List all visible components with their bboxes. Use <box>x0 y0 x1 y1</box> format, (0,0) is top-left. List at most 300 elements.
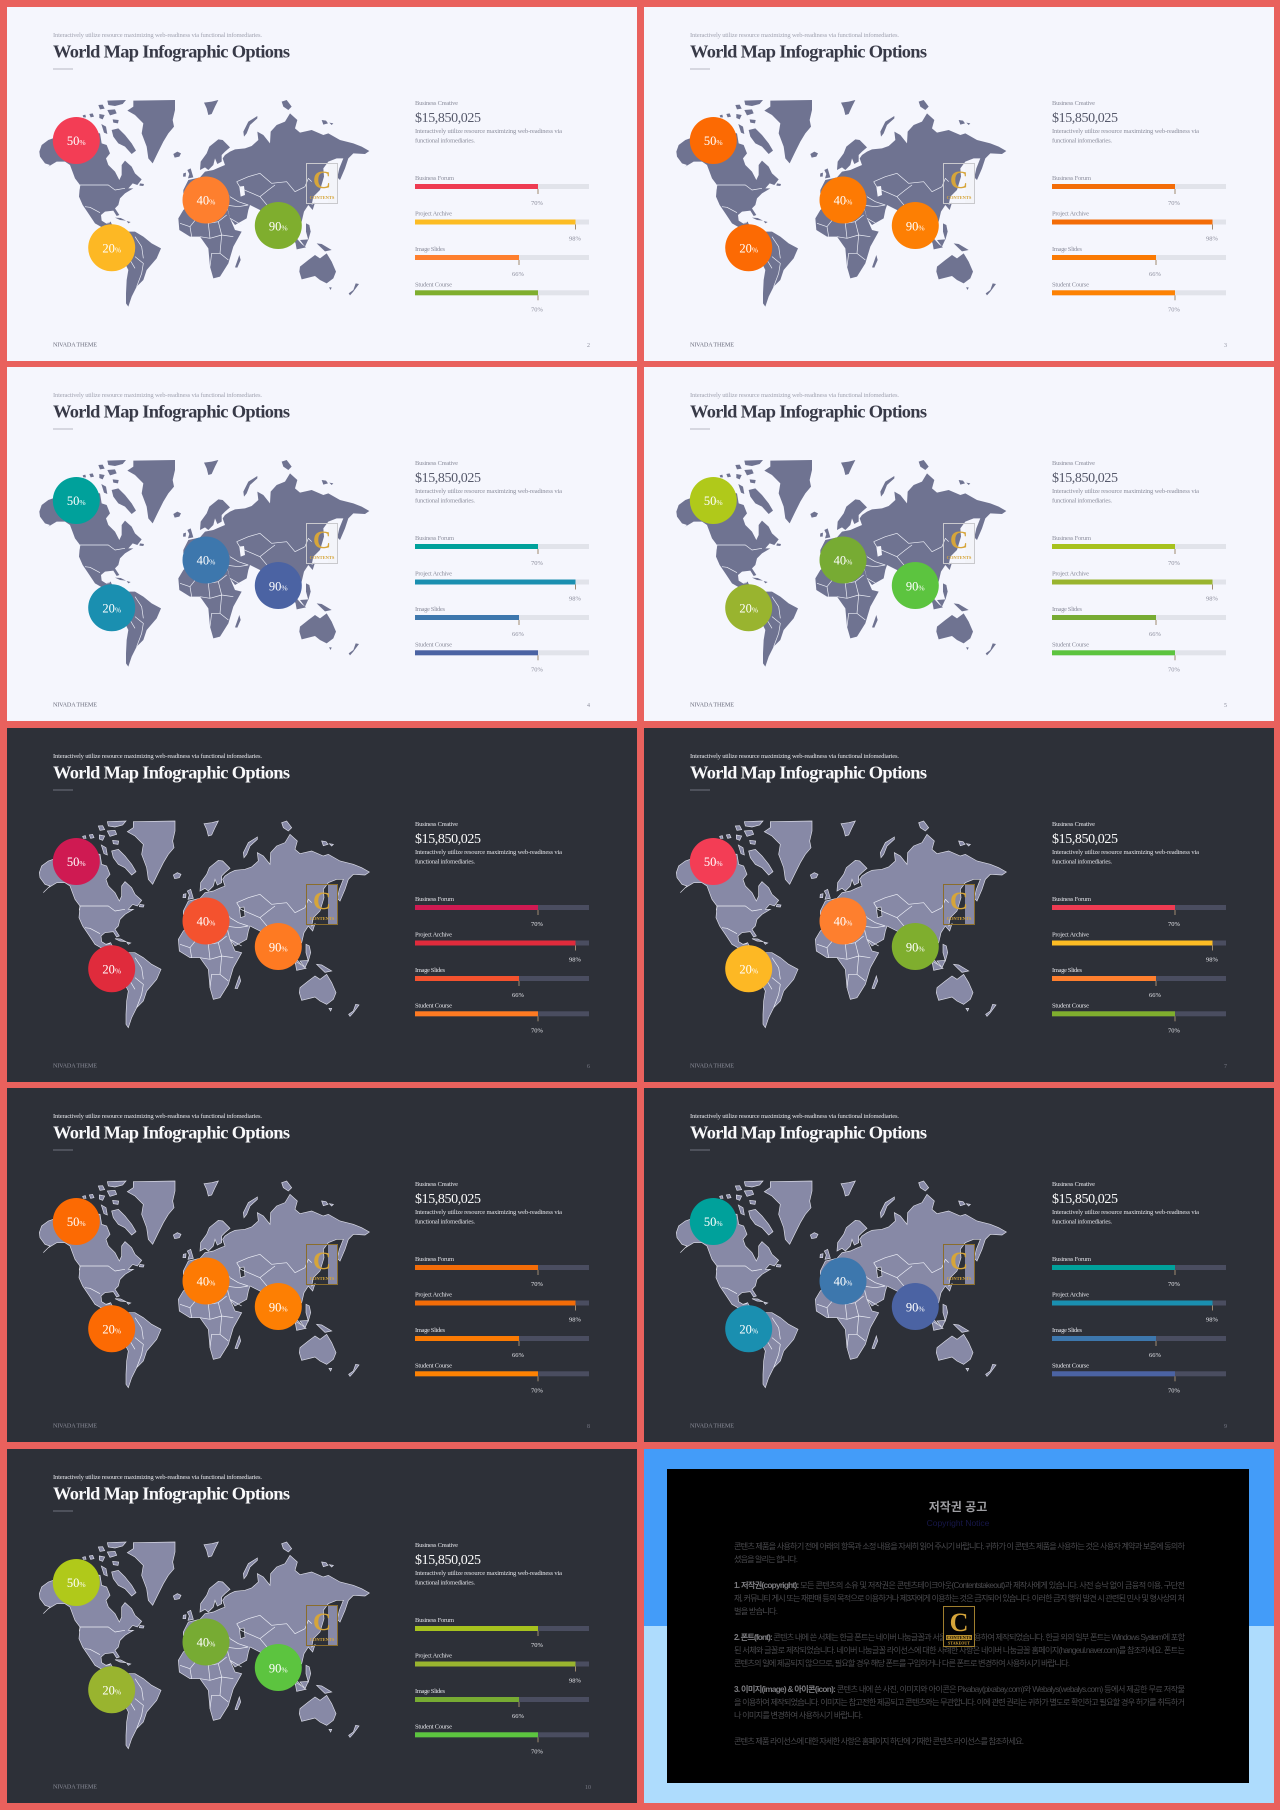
footer <box>690 1422 1227 1430</box>
watermark logo: C <box>950 888 968 915</box>
bar: Student Course: 70% <box>1168 666 1180 673</box>
map marker 90% <box>892 1283 939 1330</box>
stat block: Interactively utilize resource maximizing web-readiness via <box>1052 1209 1199 1216</box>
watermark logo <box>306 884 338 924</box>
copyright body text: 나 이미지를 변경하여 사용하시기 바랍니다. <box>734 1710 863 1720</box>
footer <box>53 702 590 709</box>
watermark logo: CONTENTS <box>947 916 972 921</box>
title block: World Map Infographic Options <box>53 42 290 62</box>
bar: Business Forum: Business Forum <box>415 1256 454 1263</box>
icon: gold C logo <box>944 1606 974 1646</box>
title block: Interactively utilize resource maximizing web-readiness via functional infomediaries. <box>690 753 899 760</box>
title block <box>53 1113 290 1150</box>
watermark logo: C <box>950 527 968 554</box>
bar: Business Forum: Business Forum <box>1052 1256 1091 1263</box>
bar: Student Course: Student Course <box>1052 641 1089 648</box>
bar: Image Slides: Image Slides <box>415 246 445 253</box>
bar: Student Course <box>415 1362 589 1394</box>
stat block <box>415 1542 562 1586</box>
stat block: functional infomediaries. <box>1052 1218 1112 1226</box>
bar: Project Archive <box>1052 210 1226 242</box>
stat block: Business Creative <box>1052 1181 1095 1188</box>
watermark logo: CONTENTS <box>310 195 335 200</box>
panel: slide 3 light teal-blue <box>7 367 637 721</box>
bar: Student Course: 70% <box>1168 1027 1180 1034</box>
bar: Business Forum <box>1052 175 1226 207</box>
watermark logo <box>944 164 974 204</box>
map marker 90% <box>892 923 939 970</box>
stat block: Business Creative <box>1052 460 1095 467</box>
map marker 20% <box>725 1305 772 1352</box>
copyright body text <box>734 1541 1185 1746</box>
title block: Interactively utilize resource maximizing web-readiness via functional infomediaries. <box>53 32 262 39</box>
map marker 40% <box>182 898 230 944</box>
title block: Interactively utilize resource maximizing web-readiness via functional infomediaries. <box>690 392 899 399</box>
bar: Student Course: 70% <box>531 666 544 673</box>
footer: 3 <box>1224 343 1227 349</box>
bar: Project Archive: Project Archive <box>415 1652 452 1660</box>
bar: Business Forum <box>415 535 589 567</box>
map marker 20%: 20% <box>739 962 758 976</box>
map marker 90%: 90% <box>906 220 925 234</box>
footer: NIVADA THEME <box>53 1784 97 1790</box>
bar: Business Forum <box>1052 1256 1226 1288</box>
stat block: Business Creative <box>415 100 458 107</box>
bar: Project Archive: 98% <box>569 596 582 602</box>
footer <box>53 1062 590 1070</box>
watermark logo: C <box>313 1248 331 1275</box>
map marker 40%: 40% <box>197 554 215 568</box>
title block: World Map Infographic Options <box>690 42 927 62</box>
title block: Interactively utilize resource maximizing web-readiness via functional infomediaries. <box>53 1474 262 1481</box>
bar: Student Course: 70% <box>1168 1387 1180 1394</box>
copyright heading: 저작권 공고 <box>929 1499 987 1514</box>
bar: Project Archive: Project Archive <box>415 210 452 218</box>
watermark logo: C <box>313 527 331 554</box>
panel: slide 4 light green <box>644 367 1274 721</box>
bar: Image Slides <box>1052 967 1226 999</box>
map marker 90%: 90% <box>269 220 288 234</box>
copyright body text: 콘텐츠 제품 라이선스에 대한 자세한 사항은 홈페이지 하단에 기재한 콘텐츠 라이선스를 참조하세요. <box>734 1736 1024 1746</box>
bar: Image Slides: 66% <box>512 1713 524 1720</box>
world map <box>676 1181 1006 1388</box>
stat block: Interactively utilize resource maximizing web-readiness via <box>415 849 562 856</box>
bar: Project Archive <box>415 932 589 964</box>
footer <box>690 1062 1227 1070</box>
map marker 90%: 90% <box>906 580 925 594</box>
stat block: Business Creative <box>1052 100 1095 107</box>
map marker 90% <box>892 562 939 609</box>
stat block <box>1052 460 1199 504</box>
bar: Image Slides <box>1052 246 1226 278</box>
bar: Student Course: Student Course <box>415 281 452 288</box>
bar: Project Archive: Project Archive <box>1052 1292 1089 1298</box>
stat block: Interactively utilize resource maximizing web-readiness via <box>415 488 562 495</box>
watermark logo: CONTENTS <box>947 195 972 200</box>
map marker 20%: 20% <box>739 1322 758 1336</box>
bar: Student Course: Student Course <box>415 641 452 648</box>
title block <box>690 392 927 430</box>
map marker 40%: 40% <box>834 1274 852 1288</box>
bar: Student Course <box>415 641 589 673</box>
copyright body text: 된 서체와 글꼴로 제작되었습니다. 네이버 나눔글꼴 라이선스에 대한 사례한 사항은 네이버 나눔글꼴 홈페이지(hangeul.naver.com)를 참조하세요. 폰트는 <box>734 1645 1185 1655</box>
watermark logo: C <box>313 167 331 194</box>
watermark logo <box>306 1606 338 1646</box>
bar: Business Forum: 70% <box>531 921 544 928</box>
map marker 40% <box>820 176 866 224</box>
bar: Student Course <box>1052 281 1226 313</box>
stat block <box>415 100 562 144</box>
bar: Project Archive: 98% <box>569 956 582 964</box>
map marker 20%: 20% <box>102 1684 121 1698</box>
bar: Project Archive: Project Archive <box>1052 570 1089 578</box>
stat block <box>415 821 562 866</box>
bar: Business Forum <box>415 896 589 928</box>
title block: World Map Infographic Options <box>53 762 290 782</box>
stat block: Business Creative <box>415 1542 458 1549</box>
footer: NIVADA THEME <box>690 342 734 348</box>
stat block: Business Creative <box>1052 821 1095 828</box>
bar: Business Forum: Business Forum <box>1052 535 1091 542</box>
bar: Business Forum: 70% <box>1168 921 1180 928</box>
bar: Project Archive <box>1052 932 1226 964</box>
bar: Image Slides <box>415 1327 589 1359</box>
bar: Business Forum: Business Forum <box>415 175 454 182</box>
copyright body text: 셨음을 알리는 합니다. <box>734 1554 798 1564</box>
bar: Business Forum: Business Forum <box>1052 175 1091 182</box>
title block: World Map Infographic Options <box>53 1484 290 1504</box>
map marker 90% <box>255 1283 302 1330</box>
title block: Interactively utilize resource maximizing web-readiness via functional infomediaries. <box>53 1113 262 1120</box>
map marker 20%: 20% <box>739 242 758 256</box>
map marker 50% <box>53 117 100 164</box>
stat block: Interactively utilize resource maximizing web-readiness via <box>415 128 562 135</box>
title block: Interactively utilize resource maximizing web-readiness via functional infomediaries. <box>53 392 262 399</box>
footer <box>53 1784 591 1791</box>
bar: Student Course: Student Course <box>415 1002 452 1009</box>
map marker 20% <box>725 224 772 271</box>
world map <box>39 460 369 667</box>
stat block: $15,850,025 <box>415 832 481 847</box>
bar: Image Slides: Image Slides <box>1052 1327 1082 1334</box>
copyright heading: Copyright Notice <box>927 1518 990 1528</box>
map marker 90% <box>255 562 302 609</box>
bar: Business Forum <box>415 175 589 207</box>
watermark logo: CONTENTS <box>947 555 972 560</box>
stat block: functional infomediaries. <box>415 1580 475 1586</box>
bar: Business Forum: 70% <box>531 1642 544 1649</box>
map marker 40% <box>182 1258 230 1304</box>
map marker 50% <box>690 838 737 885</box>
stat block: $15,850,025 <box>1052 471 1118 486</box>
bar: Project Archive: Project Archive <box>415 570 452 578</box>
stat block: functional infomediaries. <box>415 1218 475 1226</box>
bar: Student Course <box>415 1723 589 1755</box>
footer: 2 <box>587 343 590 349</box>
bar: Student Course <box>1052 641 1226 673</box>
bar: Project Archive: 98% <box>1206 1316 1218 1324</box>
stat block: $15,850,025 <box>415 1192 481 1207</box>
watermark logo: C <box>950 1248 968 1275</box>
bar: Student Course <box>415 281 589 313</box>
map marker 20%: 20% <box>102 962 121 976</box>
bar: Image Slides: 66% <box>512 1352 524 1359</box>
map marker 20% <box>88 1666 135 1713</box>
bar: Image Slides <box>415 967 589 999</box>
map marker 20%: 20% <box>102 602 121 616</box>
map marker 20%: 20% <box>102 1322 121 1336</box>
bar: Project Archive: 98% <box>569 236 582 242</box>
map marker 40%: 40% <box>197 914 215 928</box>
map marker 40% <box>820 1258 866 1304</box>
map marker 50%: 50% <box>67 494 86 508</box>
watermark logo: CONTENTS <box>310 1637 335 1642</box>
footer: 7 <box>1224 1064 1227 1070</box>
map marker 40% <box>182 1618 230 1666</box>
footer <box>690 342 1227 349</box>
watermark logo <box>306 524 338 564</box>
watermark logo <box>306 1244 338 1284</box>
panel: slide 6 dark multicolor <box>644 728 1274 1082</box>
title block: Interactively utilize resource maximizing web-readiness via functional infomediaries. <box>53 753 262 760</box>
icon: gold C logo: CONTENTS <box>947 1635 972 1640</box>
title block: Interactively utilize resource maximizing web-readiness via functional infomediaries. <box>690 32 899 39</box>
world map <box>39 821 369 1028</box>
bar: Image Slides: Image Slides <box>415 1688 445 1695</box>
stat block: $15,850,025 <box>415 471 481 486</box>
stat block: Interactively utilize resource maximizing web-readiness via <box>415 1209 562 1216</box>
bar: Student Course: 70% <box>531 1748 544 1755</box>
title block: World Map Infographic Options <box>690 402 927 422</box>
title block: Interactively utilize resource maximizing web-readiness via functional infomediaries. <box>690 1113 899 1120</box>
map marker 40%: 40% <box>834 554 852 568</box>
stat block: Business Creative <box>415 821 458 828</box>
panel: slide 9 dark green <box>7 1449 637 1803</box>
watermark logo: CONTENTS <box>310 1276 335 1281</box>
map marker 90%: 90% <box>906 1300 925 1314</box>
title block <box>690 753 927 790</box>
copyright body text: 1. 저작권(copyright): 모든 콘텐츠의 소유 및 저작권은 콘텐츠테이크아웃(Contentstakeout)과 제작사에게 있습니다. 사전 승낙 없이 금융적 이용, 구단전 <box>734 1580 1185 1590</box>
bar: Student Course <box>1052 1362 1226 1394</box>
bar: Image Slides: 66% <box>1149 992 1162 999</box>
bar: Student Course: 70% <box>1168 306 1180 313</box>
map marker 50% <box>53 1559 100 1606</box>
bar: Business Forum: 70% <box>1168 1281 1180 1288</box>
map marker 50%: 50% <box>704 855 723 869</box>
bar: Student Course: Student Course <box>1052 1362 1089 1369</box>
bar: Image Slides: 66% <box>1149 1352 1162 1359</box>
map marker 50%: 50% <box>67 855 86 869</box>
watermark logo: C <box>950 167 968 194</box>
bar: Project Archive <box>415 210 589 242</box>
bar: Image Slides: 66% <box>512 271 524 278</box>
stat block: functional infomediaries. <box>1052 498 1112 504</box>
bar: Business Forum <box>415 1256 589 1288</box>
bar: Student Course <box>415 1002 589 1034</box>
watermark logo: C <box>313 888 331 915</box>
copyright body text: 콘텐츠의 일에 제공되지 않으므로, 필요할 경우 해당 폰트를 구입하거나 다른 폰트로 변경하여 사용하시기 바랍니다. <box>734 1658 1070 1668</box>
bar: Project Archive <box>415 570 589 602</box>
world map <box>39 100 369 307</box>
bar: Student Course: 70% <box>531 306 544 313</box>
bar: Image Slides <box>415 246 589 278</box>
bar: Image Slides: Image Slides <box>415 606 445 613</box>
icon: gold C logo: C <box>950 1608 968 1637</box>
bar: Project Archive <box>415 1292 589 1324</box>
footer: NIVADA THEME <box>690 702 734 708</box>
map marker 50% <box>690 117 737 164</box>
map marker 40% <box>182 176 230 224</box>
stat block: Interactively utilize resource maximizing web-readiness via <box>415 1570 562 1577</box>
bar: Image Slides: Image Slides <box>415 1327 445 1334</box>
bar: Project Archive: Project Archive <box>1052 210 1089 218</box>
map marker 50%: 50% <box>704 134 723 148</box>
map marker 50% <box>690 477 737 524</box>
bar: Student Course: Student Course <box>415 1723 452 1730</box>
bar: Image Slides: 66% <box>512 631 524 638</box>
map marker 90% <box>255 923 302 970</box>
bar: Business Forum: 70% <box>531 200 544 207</box>
stat block <box>415 460 562 504</box>
map marker 40%: 40% <box>197 1636 215 1650</box>
map marker 40% <box>182 536 230 584</box>
map marker 50%: 50% <box>67 1576 86 1590</box>
stat block <box>1052 821 1199 866</box>
map marker 50% <box>53 838 100 885</box>
title block <box>53 1474 290 1512</box>
bar: Project Archive: Project Archive <box>415 1292 452 1298</box>
stat block: $15,850,025 <box>1052 1192 1118 1207</box>
bar: Image Slides <box>1052 606 1226 638</box>
watermark logo: CONTENTS <box>310 916 335 921</box>
bar: Business Forum: 70% <box>531 560 544 567</box>
copyright body text: 벌을 받습니다. <box>734 1606 778 1616</box>
stat block: $15,850,025 <box>415 111 481 126</box>
stat block: $15,850,025 <box>1052 832 1118 847</box>
footer: NIVADA THEME <box>53 1422 97 1430</box>
title block: World Map Infographic Options <box>53 1122 290 1142</box>
bar: Business Forum: 70% <box>531 1281 544 1288</box>
bar: Project Archive: 98% <box>569 1316 582 1324</box>
bar: Business Forum <box>415 1617 589 1649</box>
copyright body text: 콘텐츠 제품을 사용하기 전에 아래의 항목과 소정 내용을 자세히 읽어 주시기 바랍니다. 귀하가 이 콘텐츠 제품을 사용하는 것은 사용자 계약과 보증에 동의하 <box>734 1541 1185 1551</box>
map marker 20% <box>88 945 135 992</box>
copyright heading <box>927 1499 990 1528</box>
bar: Image Slides: Image Slides <box>1052 606 1082 613</box>
title block <box>690 32 927 70</box>
panel: slide 8 dark teal-blue <box>644 1088 1274 1442</box>
map marker 50%: 50% <box>704 1215 723 1229</box>
bar: Image Slides: Image Slides <box>1052 246 1082 253</box>
title block: World Map Infographic Options <box>53 402 290 422</box>
bar: Project Archive <box>415 1652 589 1684</box>
panel: slide 2 light orange <box>644 7 1274 361</box>
copyright body text: 을 이용하여 제작되었습니다. 이미지는 참고전한 제공되고 콘텐츠와는 무관합니다. 이에 관련 권리는 귀하가 별도로 확인하고 필요할 경우 허가를 취득하거 <box>734 1697 1185 1707</box>
footer: 6 <box>587 1064 590 1070</box>
map marker 90%: 90% <box>269 1662 288 1676</box>
map marker 40%: 40% <box>834 194 852 208</box>
bar: Student Course: Student Course <box>415 1362 452 1369</box>
title block <box>53 32 290 70</box>
title block <box>690 1113 927 1150</box>
bar: Image Slides: Image Slides <box>1052 967 1082 974</box>
bar: Image Slides <box>1052 1327 1226 1359</box>
footer: NIVADA THEME <box>53 1062 97 1070</box>
map marker 20%: 20% <box>102 242 121 256</box>
stat block: Business Creative <box>415 460 458 467</box>
map marker 50%: 50% <box>67 1215 86 1229</box>
map marker 40%: 40% <box>197 1274 215 1288</box>
bar: Project Archive <box>1052 570 1226 602</box>
map marker 20% <box>725 584 772 631</box>
panel: copyright notice <box>644 1449 1274 1803</box>
bar: Project Archive: Project Archive <box>1052 932 1089 938</box>
world map <box>39 1181 369 1388</box>
bar: Business Forum: Business Forum <box>415 1617 454 1624</box>
map marker 90%: 90% <box>269 580 288 594</box>
watermark logo: C <box>313 1609 331 1636</box>
bar: Student Course <box>1052 1002 1226 1034</box>
map marker 50%: 50% <box>67 134 86 148</box>
stat block <box>415 1181 562 1226</box>
panel: slide 7 dark orange <box>7 1088 637 1442</box>
watermark logo <box>306 164 338 204</box>
stat block <box>1052 1181 1199 1226</box>
world map <box>676 821 1006 1028</box>
footer <box>690 702 1227 709</box>
bar: Business Forum: 70% <box>1168 560 1180 567</box>
stat block: Interactively utilize resource maximizing web-readiness via <box>1052 849 1199 856</box>
bar: Business Forum: 70% <box>1168 200 1180 207</box>
map marker 50% <box>53 477 100 524</box>
stat block: functional infomediaries. <box>1052 858 1112 866</box>
watermark logo: CONTENTS <box>947 1276 972 1281</box>
stat block <box>1052 100 1199 144</box>
footer: 8 <box>587 1424 590 1430</box>
map marker 40%: 40% <box>197 194 215 208</box>
map marker 40% <box>820 898 866 944</box>
bar: Business Forum <box>1052 896 1226 928</box>
footer: NIVADA THEME <box>53 702 97 708</box>
stat block: functional infomediaries. <box>415 858 475 866</box>
map marker 90% <box>255 1644 302 1691</box>
copyright body text: 3. 이미지(image) & 아이콘(icon): 콘텐츠 내에 쓴 사진, 이미지와 아이콘은 Pixabay(pixabay.com)와 Webalys(webalys.com) 등에서 제공한 무료 저작물 <box>734 1684 1185 1694</box>
stat block: functional infomediaries. <box>415 498 475 504</box>
bar: Image Slides: Image Slides <box>415 967 445 974</box>
bar: Business Forum: Business Forum <box>415 896 454 903</box>
panel: slide 5 dark crimson-orange <box>7 728 637 1082</box>
footer: NIVADA THEME <box>53 342 97 348</box>
bar: Student Course: Student Course <box>1052 1002 1089 1009</box>
map marker 50% <box>690 1198 737 1245</box>
stat block: Interactively utilize resource maximizing web-readiness via <box>1052 128 1199 135</box>
footer <box>53 342 590 349</box>
bar: Image Slides <box>415 1688 589 1720</box>
bar: Business Forum <box>1052 535 1226 567</box>
map marker 90% <box>892 202 939 249</box>
bar: Image Slides: 66% <box>1149 631 1162 638</box>
stat block: Business Creative <box>415 1181 458 1188</box>
bar: Student Course: 70% <box>531 1387 544 1394</box>
title block <box>53 392 290 430</box>
title block <box>53 753 290 790</box>
world map <box>39 1542 369 1749</box>
footer <box>53 1422 590 1430</box>
watermark logo <box>944 884 974 924</box>
footer: 10 <box>585 1785 591 1791</box>
copyright body text: 2. 폰트(font): 콘텐츠 내에 쓴 서체는 한글 폰트는 네이버 나눔글꼴과 서울서체를 사용하여 제작되었습니다. 한글 외의 일부 폰트는 Windows System에 포함 <box>734 1632 1185 1642</box>
map marker 90% <box>255 202 302 249</box>
